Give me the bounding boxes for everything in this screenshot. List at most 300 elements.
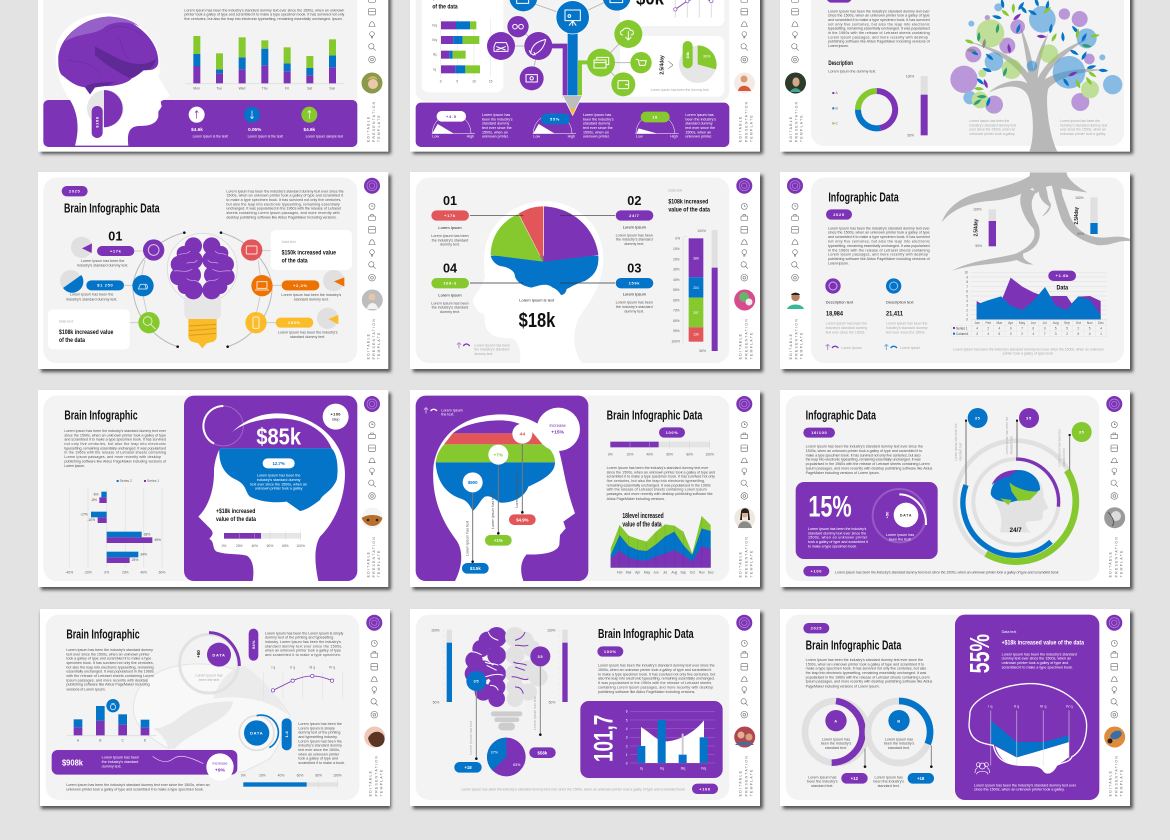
area chart: 6 (966, 290, 968, 294)
paragraph: in the 1960s with the release of Letraset sheets containing (828, 248, 930, 252)
progress bar (608, 440, 714, 457)
data table: May (1019, 321, 1025, 325)
ring A footer: Lorem Ipsum has (808, 775, 837, 779)
paragraph (64, 429, 167, 468)
small captions: Lorem Ipsum has been the industry's (278, 330, 338, 334)
sidebar label: TEMPLATE (749, 768, 753, 796)
paragraph: containing Lorem Ipsum passages, and more recently with desktop (598, 685, 713, 689)
small captions: standard dummy text. (294, 297, 329, 301)
paragraph: Lorem Ipsum has been the industry's standard dummy text ever (607, 466, 709, 470)
paragraph: the leap into electronic typesetting, remaining essentially unchanged. It was (806, 458, 921, 462)
brain cap and value: Lorem Ipsum has been the (257, 474, 300, 478)
sidebar icons (736, 615, 752, 718)
vertical pill bottom: 1.4 (284, 731, 289, 738)
footer text: unknown printer took a galley of type and scrambled it to make a type specimen book. (66, 787, 204, 791)
panel text: Lorem Ipsum has been the industry's standard (1002, 652, 1077, 656)
sidebar label: EDITABLE (366, 551, 370, 577)
line chart: IV q (329, 665, 335, 669)
nodes (124, 239, 282, 333)
footnote (457, 343, 510, 356)
paragraph: specimen book. It has survived not only five centuries, (66, 661, 154, 665)
head silhouette (433, 414, 575, 581)
paragraph: Lorem Ipsum passages, and more recently with desktop (64, 455, 161, 459)
callout 02 (616, 194, 653, 246)
year pill (803, 623, 829, 633)
sidebar icons (364, 0, 380, 63)
intro text: five centuries, but also the leap into electronic typesetting, remaining essentially unchanged. Ipsum. (184, 17, 343, 21)
increased value text: +$18k increased (216, 508, 255, 515)
pencil tip (563, 96, 582, 115)
paragraph: Lorem Ipsum passages, and more recently with desktop (828, 253, 928, 257)
ring A footer (807, 773, 868, 788)
vertical progress 2 (1074, 196, 1098, 236)
ring B footer: Lorem Ipsum has (875, 775, 903, 779)
paragraph: PageMaker including versions of Lorem Ipsum. (806, 685, 880, 689)
vertical progress (697, 229, 718, 353)
heading right: Data text (668, 189, 682, 193)
callout 02: 02 (627, 194, 641, 208)
stacked column: 389 (693, 256, 699, 260)
vertical progress 2: 50% (1077, 232, 1084, 236)
metric 1: 18,984 (826, 311, 844, 317)
progress bar: 100% (296, 544, 305, 548)
pill: 100% (666, 430, 678, 435)
stat: down: 0.05% (248, 127, 262, 132)
card: horizontal bars: IIq (433, 53, 437, 57)
title: Infographic Data (806, 408, 877, 422)
paragraph: make a type specimen book. It has survived not only five centuries, but also (806, 667, 926, 671)
panel text: +$18k increased value of the data (1002, 639, 1084, 646)
legend note: the text. (441, 413, 454, 417)
ring A: standard text. (825, 746, 847, 750)
data table: 5 (1055, 326, 1057, 330)
purple band (52, 750, 237, 781)
markers with captions (466, 646, 550, 760)
chart heading: 18level increased (622, 513, 664, 520)
paragraph: essentially unchanged. It was popularised in the 1960s (66, 670, 154, 674)
brain outline chart: III q (1040, 705, 1046, 709)
area chart: 3 (966, 304, 968, 308)
purple card: +50 (885, 511, 890, 518)
paragraph top (265, 631, 344, 657)
sidebar label (1109, 536, 1123, 577)
card: horizontal bars: 0 (440, 80, 442, 84)
purple band with gauges: text ever since the (685, 126, 715, 130)
callout 04: 04 (443, 261, 457, 275)
head with brain (991, 470, 1048, 534)
caption right: industry's standard dummy text (1060, 123, 1107, 127)
purple band with gauges: 1500s, when an (482, 130, 508, 134)
sidebar label: PRESENTATION (744, 318, 748, 359)
brain stripes (436, 420, 555, 511)
brain outline chart: II q (1014, 705, 1019, 709)
purple band: dummy text. (102, 764, 122, 768)
sidebar icons (1106, 615, 1122, 718)
stacked bar chart: Thu (262, 87, 268, 91)
paragraph: Lorem Ipsum has been the industry's standard dummy text ever since the (806, 658, 923, 662)
paragraph bottom: when an unknown printer (298, 752, 340, 756)
paragraph: took a galley of type and scrambled it to make a type (66, 657, 151, 661)
progress bar (222, 531, 305, 548)
step badge (323, 404, 349, 430)
vertical progress 1 (973, 208, 996, 248)
bar chart: D (144, 738, 147, 742)
year pill: 2025 (69, 189, 81, 194)
purple band: +9% (215, 767, 226, 773)
callout 03 (616, 261, 653, 313)
tree leaves (964, 0, 1108, 107)
icon nodes: purple (487, 16, 552, 90)
purple card with chart: 4 (626, 727, 628, 731)
paragraph: desktop publishing software like Aldus PageMaker including versions. (226, 215, 337, 219)
paragraph: but also the leap into electronic typesetting, remaining (66, 665, 154, 669)
data table (952, 320, 1107, 337)
progress bar: 100% (705, 453, 714, 457)
value pills: $58k (538, 750, 548, 755)
sidebar label: EDITABLE (369, 770, 373, 796)
diverging bar chart: 60% (159, 570, 165, 574)
purple band with gauges: been the industry's (583, 117, 614, 121)
caption right: unknown printer took a galley. (1060, 132, 1106, 136)
line chart: I q (271, 665, 275, 669)
legend (832, 91, 839, 125)
purple card: 1500s, when an unknown printer (808, 536, 868, 540)
stacked column: 100% (671, 339, 680, 343)
footer: +100 (699, 786, 711, 791)
sidebar label: TEMPLATE (749, 331, 753, 359)
diverging bar chart: 34% (140, 552, 147, 556)
data table: Jun (1031, 321, 1036, 325)
year pill (827, 0, 852, 3)
step badge: +100 (331, 411, 341, 416)
purple card with chart: Iq (640, 767, 643, 771)
panel footer (974, 783, 1077, 792)
avatar (1104, 507, 1125, 528)
stat: green: Lorem Ipsum sample text (306, 135, 343, 139)
caption right: Lorem Ipsum has been the (1060, 119, 1100, 123)
pill: 100% (604, 649, 617, 654)
vertical progress right: 50% (549, 700, 555, 704)
data table: 2 (987, 326, 989, 330)
data table: 6 (1032, 326, 1034, 330)
mini pies (60, 237, 344, 329)
stacked column: 204 (693, 286, 699, 290)
callout 04: 169-3 (443, 281, 457, 286)
data table: Series 1 (956, 326, 968, 330)
metric 2 (884, 278, 928, 350)
small captions: industry's standard dummy text. (66, 298, 117, 302)
callout 04: Lorem Ipsum has been (431, 301, 469, 305)
sidebar icons (1106, 396, 1122, 499)
paragraph: also the leap into electronic typesetting, remaining essentially unchanged. (598, 677, 715, 681)
pill values: +17k (110, 249, 122, 254)
caption right: ever since the 1500s, when an (1060, 128, 1106, 132)
ring B (868, 701, 933, 768)
paragraph: Lorem Ipsum has been the industry's standard dummy text ever since the (598, 664, 715, 668)
panel text: unknown printer took a galley of type and (1002, 661, 1068, 665)
brain cap and value: 12,7% (273, 461, 285, 466)
stacked area chart: Apr (635, 571, 641, 575)
ring B: standard text. (888, 746, 910, 750)
purple band with gauges: +4.5 (446, 114, 457, 119)
paragraph: text ever since the 1500s, when an unknown printer (66, 652, 150, 656)
stacked area chart: Aug (671, 571, 677, 575)
paragraph (607, 466, 715, 501)
tree canopy circles (950, 3, 1122, 114)
faint head background (133, 664, 290, 772)
vertical progress 2: 2.5/4day (1074, 206, 1080, 224)
data table: Oct (1076, 321, 1081, 325)
sidebar label: TEMPLATE (379, 768, 383, 796)
purple band with gauges: text ever since the (583, 126, 613, 130)
purple band with gauges: Low (432, 135, 439, 139)
sidebar label: TEMPLATE (749, 114, 753, 142)
markers: Lorem Ipsum has been the (1005, 417, 1009, 454)
paragraph: not only five centuries, but also the leap into electronic (828, 239, 930, 243)
card: horizontal bars: IVq (432, 23, 437, 27)
pill (803, 428, 835, 438)
purple panel (416, 396, 588, 581)
progress bar: 20% (259, 774, 266, 778)
ring A footer: standard text. (811, 784, 833, 788)
lightbulb (167, 233, 237, 348)
slide: concentric rings (row 3 right) (780, 390, 1133, 590)
purple band with gauges: Lorem Ipsum has (685, 113, 714, 117)
markers with captions: Lorem Ipsum has text (533, 696, 537, 730)
metric 1: Lorem Ipsum (841, 346, 862, 350)
pill values: +2,3% (293, 283, 308, 288)
head silhouette (198, 413, 345, 581)
diverging bar chart: -6% (93, 492, 99, 496)
purple band with gauges: standard dummy (685, 122, 713, 126)
sidebar label: PRESENTATION (744, 536, 748, 577)
diverging bar chart: 25% (132, 558, 138, 562)
card: $150k: of the data (282, 258, 308, 265)
paragraph: publishing software like Aldus PageMaker including versions of (828, 40, 931, 44)
slide: head pie (row 2 middle) (410, 172, 763, 372)
legend: B (836, 106, 839, 110)
metric 2: Lorem Ipsum has been the (886, 322, 928, 326)
callout 02: Lorem Ipsum (623, 224, 647, 229)
sidebar label (789, 101, 804, 142)
heading right: $108k increased (668, 199, 708, 206)
purple band: the industry's standard (102, 760, 138, 764)
half pie chart: $168 (94, 116, 99, 128)
slide: tree infographic (top right) (780, 0, 1133, 154)
intro text (184, 8, 345, 21)
footer pill (803, 566, 1059, 576)
callout 03: 03 (627, 261, 641, 275)
vertical progress bar (906, 75, 928, 137)
donut chart (858, 91, 895, 128)
icon nodes: green (587, 20, 652, 96)
slide: data rings and head outline (row 4 left) (40, 609, 391, 809)
brain outline chart: IV q (1066, 705, 1073, 709)
data table: 5 (1089, 326, 1091, 330)
purple band: Increase (212, 761, 228, 766)
metric 2: industry's standard dummy (886, 326, 928, 330)
purple band: Lorem Ipsum has been (102, 756, 139, 760)
vertical progress 1: 50% (975, 244, 982, 248)
data table: 5 (1077, 332, 1079, 336)
brain outline chart (969, 684, 1087, 774)
ring A: A (834, 718, 838, 723)
line chart: III q (310, 665, 315, 669)
sidebar label: PRESENTATION (744, 755, 748, 796)
stacked area chart: Jun (653, 571, 659, 575)
paragraph: since the 1500s, when an unknown printer took a galley of type (828, 231, 930, 235)
stat: up (189, 107, 228, 139)
avatar (1104, 726, 1125, 748)
vertical captions: Lorem Ipsum has text (515, 473, 519, 508)
vertical pill top: 54% (251, 640, 256, 649)
card: $108k: Data text (59, 319, 73, 323)
progress bar: 20% (627, 453, 633, 457)
value pills (454, 747, 556, 773)
purple band with gauges: been the industry's (685, 117, 716, 121)
purple band with gauges: been the industry's (482, 117, 513, 121)
stacked area chart: Mar (626, 571, 632, 575)
callout 02: Lorem Ipsum has been (616, 233, 653, 237)
brain pie (491, 206, 598, 295)
diverging bar chart: Series 2 (120, 479, 132, 483)
callout 02: the industry's standard (616, 238, 653, 242)
ring B footer: been the industry's (873, 780, 904, 784)
data table: 3 (1010, 332, 1012, 336)
data table: 4 (1089, 332, 1091, 336)
progress bar: 40% (646, 453, 653, 457)
purple band: $908k (62, 758, 84, 767)
sidebar label: PRESENTATION (1114, 755, 1118, 796)
paragraph: unchanged. It was popularised in the 1960s with the release of Letraset (226, 207, 341, 211)
callout 03: Lorem Ipsum (623, 292, 647, 297)
metric 2: Description text (886, 299, 914, 304)
paragraph bottom: Lorem Ipsum has been the (298, 722, 342, 726)
vertical progress bar: 50% (907, 133, 914, 137)
icon nodes: blue (509, 0, 631, 34)
line chart: II q (290, 665, 295, 669)
pie chart: 63% (513, 763, 521, 767)
paragraph: Ipsum passages, and more recently with desktop publishing software like Aldus (806, 466, 933, 470)
diverging bar chart (65, 479, 165, 574)
pill (659, 427, 685, 438)
stacked bar chart: Fri (285, 87, 289, 91)
connector lines (471, 443, 524, 563)
data table: Apr (1008, 321, 1014, 325)
caption left: unknown printer took a galley. (969, 132, 1015, 136)
vertical progress: 50% (699, 349, 706, 353)
progress bar: 0% (222, 544, 226, 548)
progress bar: 100% (333, 774, 342, 778)
paragraph: not only five centuries, but also the leap into electronic (64, 442, 166, 446)
paragraph bottom: text ever since the 1500s, (298, 748, 340, 752)
stat: up: Lorem Ipsum is the text! (193, 135, 228, 139)
markers: Lorem Ipsum has been the (1058, 429, 1062, 467)
sidebar label: TEMPLATE (1119, 768, 1123, 796)
purple card: took a galley of type and scrambled it (808, 540, 868, 544)
central value (519, 298, 556, 332)
callout 04: dummy text. (440, 310, 460, 314)
stacked area chart: Nov (699, 571, 705, 575)
paragraph: and scrambled it to make a type specimen book. It has survived (64, 438, 166, 442)
paragraph (828, 9, 931, 48)
chart caption: printer took a galley of type book. (1003, 352, 1054, 356)
markers: standard text (1062, 448, 1066, 467)
sidebar label: EDITABLE (739, 115, 743, 142)
stacked bar chart (185, 36, 344, 91)
paragraph: but also the leap into electronic typesetting, remaining essentially (226, 202, 340, 206)
sidebar icons (364, 178, 380, 281)
data table: 3 (1044, 326, 1046, 330)
progress bar: 20% (236, 544, 243, 548)
intro text: Lorem Ipsum has been the industry's standard dummy text ever since the 1500s, when an unknown (184, 8, 344, 12)
stacked column: 30% (673, 268, 680, 272)
title: Brain Infographic Data (64, 202, 160, 216)
paragraph: and scrambled it to make a type specimen book. It has survived (828, 18, 930, 22)
central value: Lorem Ipsum is text (519, 298, 555, 303)
vertical progress left: 100% (431, 628, 440, 632)
purple band with gauges: Lorem Ipsum has (583, 113, 611, 117)
paragraph (806, 658, 933, 689)
data donut top: DATA (212, 652, 226, 657)
stacked column: 50% (673, 288, 680, 292)
paragraph: since the 1500s, when an unknown printer took a galley of type and (607, 470, 715, 474)
purple card: DATA (900, 513, 912, 517)
stacked area chart: Oct (690, 571, 695, 575)
callout 01: dummy text. (440, 243, 460, 247)
paragraph bottom: industry's standard dummy (298, 744, 342, 748)
stacked bar chart: Tue (217, 87, 222, 91)
stacked column: 0% (675, 237, 680, 241)
sidebar label: EDITABLE (789, 115, 793, 142)
slide: striped head (row 3 middle) (410, 390, 763, 590)
avatar (734, 508, 755, 528)
diverging bar chart: 20% (122, 570, 129, 574)
paragraph: with the release of Letraset sheets containing Lorem (66, 674, 154, 678)
stacked bar chart: Wed (239, 87, 246, 91)
tree roots (942, 172, 1130, 271)
area chart: Data (1056, 284, 1069, 291)
paragraph: Lorem Ipsum has been the industry's standard dummy text ever (828, 226, 930, 230)
paragraph: PageMaker including versions of Lorem Ipsum. (806, 471, 880, 475)
stacked bar chart: Sat (307, 87, 312, 91)
chart heading (622, 513, 664, 528)
data donut top: +50 (196, 650, 201, 658)
slide: half brain and column chart (row 4 middle) (410, 609, 763, 809)
card: $150k: Data text (282, 240, 296, 244)
sidebar icons (736, 0, 752, 63)
heading right: value of the data (668, 207, 710, 214)
area chart: 10 (964, 271, 968, 275)
sidebar label: PRESENTATION (795, 101, 799, 142)
paragraph: versions of Lorem Ipsum. (66, 687, 106, 691)
sidebar label (739, 755, 753, 796)
value pills: +18 (464, 765, 472, 770)
area chart: 7 (966, 285, 968, 289)
year pill: 2025 (811, 626, 822, 631)
purple card with chart: 5 (626, 718, 628, 722)
55 percent: 55% (964, 634, 995, 673)
paragraph: with the release of Letraset sheets containing Lorem Ipsum (607, 488, 707, 492)
paragraph bottom: took a galley of type and (298, 757, 338, 761)
avatar (364, 726, 385, 748)
callout 01: 01 (443, 194, 457, 208)
purple card with chart: IVq (701, 767, 706, 771)
purple card: 15% (808, 491, 852, 524)
ring B footer: +18 (917, 776, 925, 781)
slide: pencil mind map (top middle) (410, 0, 763, 154)
slide: 55% brain outline (row 4 right) (780, 609, 1133, 809)
